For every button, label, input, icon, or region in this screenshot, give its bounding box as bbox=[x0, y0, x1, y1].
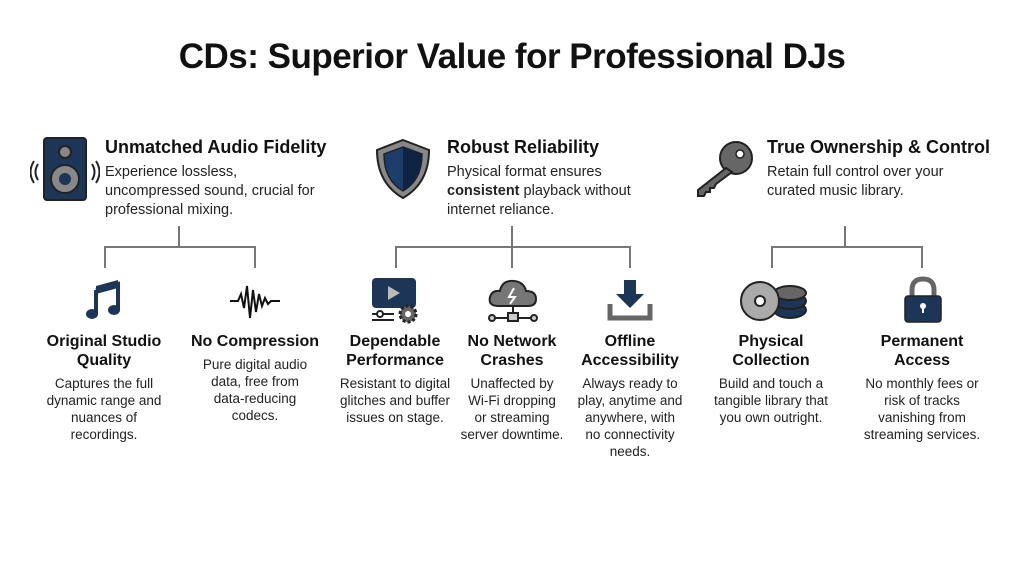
text: ownership bbox=[767, 164, 944, 199]
sub: offline accessibility: Always ready to bbox=[582, 376, 678, 391]
sub: permanent access: No monthly fees or bbox=[865, 376, 979, 391]
text: reliability: internet reliance. bbox=[447, 202, 554, 218]
icon: download bbox=[608, 280, 652, 320]
icon: shield bbox=[376, 138, 430, 200]
sub: offline accessibility bbox=[578, 333, 682, 459]
heading: audio fidelity: Unmatched Audio Fidelity bbox=[105, 137, 326, 157]
sub: original studio quality bbox=[47, 333, 161, 442]
sub: physical collection: Build and touch a bbox=[719, 376, 823, 391]
sub: original studio quality: nuances of bbox=[71, 410, 137, 425]
icon: speaker bbox=[30, 137, 100, 201]
sub: physical collection bbox=[714, 333, 828, 425]
text: reliability: consistent playback without bbox=[447, 183, 631, 199]
text: reliability: Physical format ensures bbox=[447, 164, 602, 180]
sub: physical collection: Physical bbox=[739, 333, 803, 350]
sub: permanent access: Access bbox=[894, 352, 950, 369]
sub: physical collection: Collection bbox=[732, 352, 810, 369]
icon: music note bbox=[86, 280, 120, 319]
heading: ownership: True Ownership & Control bbox=[767, 137, 990, 157]
sub: dependable performance: Dependable bbox=[350, 333, 440, 350]
sub: dependable performance bbox=[340, 333, 450, 425]
sub: physical collection: tangible library that bbox=[714, 393, 828, 408]
icon: cd stack bbox=[740, 281, 807, 321]
sub: original studio quality: Original Studio bbox=[47, 333, 161, 350]
sub: offline accessibility: Accessibility bbox=[581, 352, 679, 369]
sub: permanent access: streaming services. bbox=[864, 427, 980, 442]
icon: padlock bbox=[904, 276, 942, 323]
text: audio fidelity: professional mixing. bbox=[105, 202, 233, 218]
sub: offline accessibility: needs. bbox=[610, 444, 650, 459]
icon: key bbox=[697, 141, 753, 197]
sub: no network crashes: No Network bbox=[468, 333, 556, 350]
sub: no network crashes: Wi-Fi dropping bbox=[468, 393, 556, 408]
sub: no network crashes: Unaffected by bbox=[470, 376, 554, 391]
text: audio fidelity: Experience lossless, bbox=[105, 164, 237, 180]
sub: permanent access bbox=[864, 333, 980, 442]
sub: original studio quality: Quality bbox=[77, 352, 131, 369]
sub: dependable performance: glitches and buffer bbox=[340, 393, 450, 408]
sub: offline accessibility: play, anytime and bbox=[578, 393, 682, 408]
sub: no compression: data, free from bbox=[211, 374, 299, 389]
sub: permanent access: risk of tracks bbox=[884, 393, 960, 408]
sub: no network crashes bbox=[461, 333, 563, 442]
sub: no compression: No Compression bbox=[191, 333, 319, 350]
text: reliability bbox=[447, 164, 631, 218]
sub: physical collection: you own outright. bbox=[720, 410, 822, 425]
sub: offline accessibility: no connectivity bbox=[585, 427, 675, 442]
text: audio fidelity bbox=[105, 164, 315, 218]
sub: offline accessibility: Offline bbox=[605, 333, 655, 350]
icon: video player settings bbox=[372, 278, 418, 324]
text: ownership: Retain full control over your bbox=[767, 164, 944, 180]
sub: dependable performance: Resistant to digital bbox=[340, 376, 450, 391]
sub: original studio quality: dynamic range and bbox=[47, 393, 161, 408]
heading: reliability: Robust Reliability bbox=[447, 137, 599, 157]
sub: no network crashes: server downtime. bbox=[461, 427, 563, 442]
sub: original studio quality: Captures the full bbox=[55, 376, 153, 391]
icon: waveform bbox=[230, 286, 280, 318]
sub: no compression: data-reducing bbox=[214, 391, 296, 406]
sub: permanent access: vanishing from bbox=[878, 410, 966, 425]
sub: dependable performance: issues on stage. bbox=[346, 410, 444, 425]
sub: permanent access: Permanent bbox=[881, 333, 963, 350]
sub: original studio quality: recordings. bbox=[71, 427, 137, 442]
sub: no compression: Pure digital audio bbox=[203, 357, 307, 372]
sub: no network crashes: or streaming bbox=[474, 410, 550, 425]
title: CDs: Superior Value for Professional DJs bbox=[179, 37, 845, 76]
text: ownership: curated music library. bbox=[767, 183, 904, 199]
icon: cloud network bbox=[488, 280, 538, 322]
text: audio fidelity: uncompressed sound, crucial for bbox=[105, 183, 315, 199]
sub: no compression: codecs. bbox=[232, 408, 278, 423]
sub: dependable performance: Performance bbox=[346, 352, 444, 369]
sub: no network crashes: Crashes bbox=[480, 352, 544, 369]
connectors bbox=[104, 226, 923, 268]
sub: no compression bbox=[191, 333, 319, 423]
sub: offline accessibility: anywhere, with bbox=[585, 410, 675, 425]
